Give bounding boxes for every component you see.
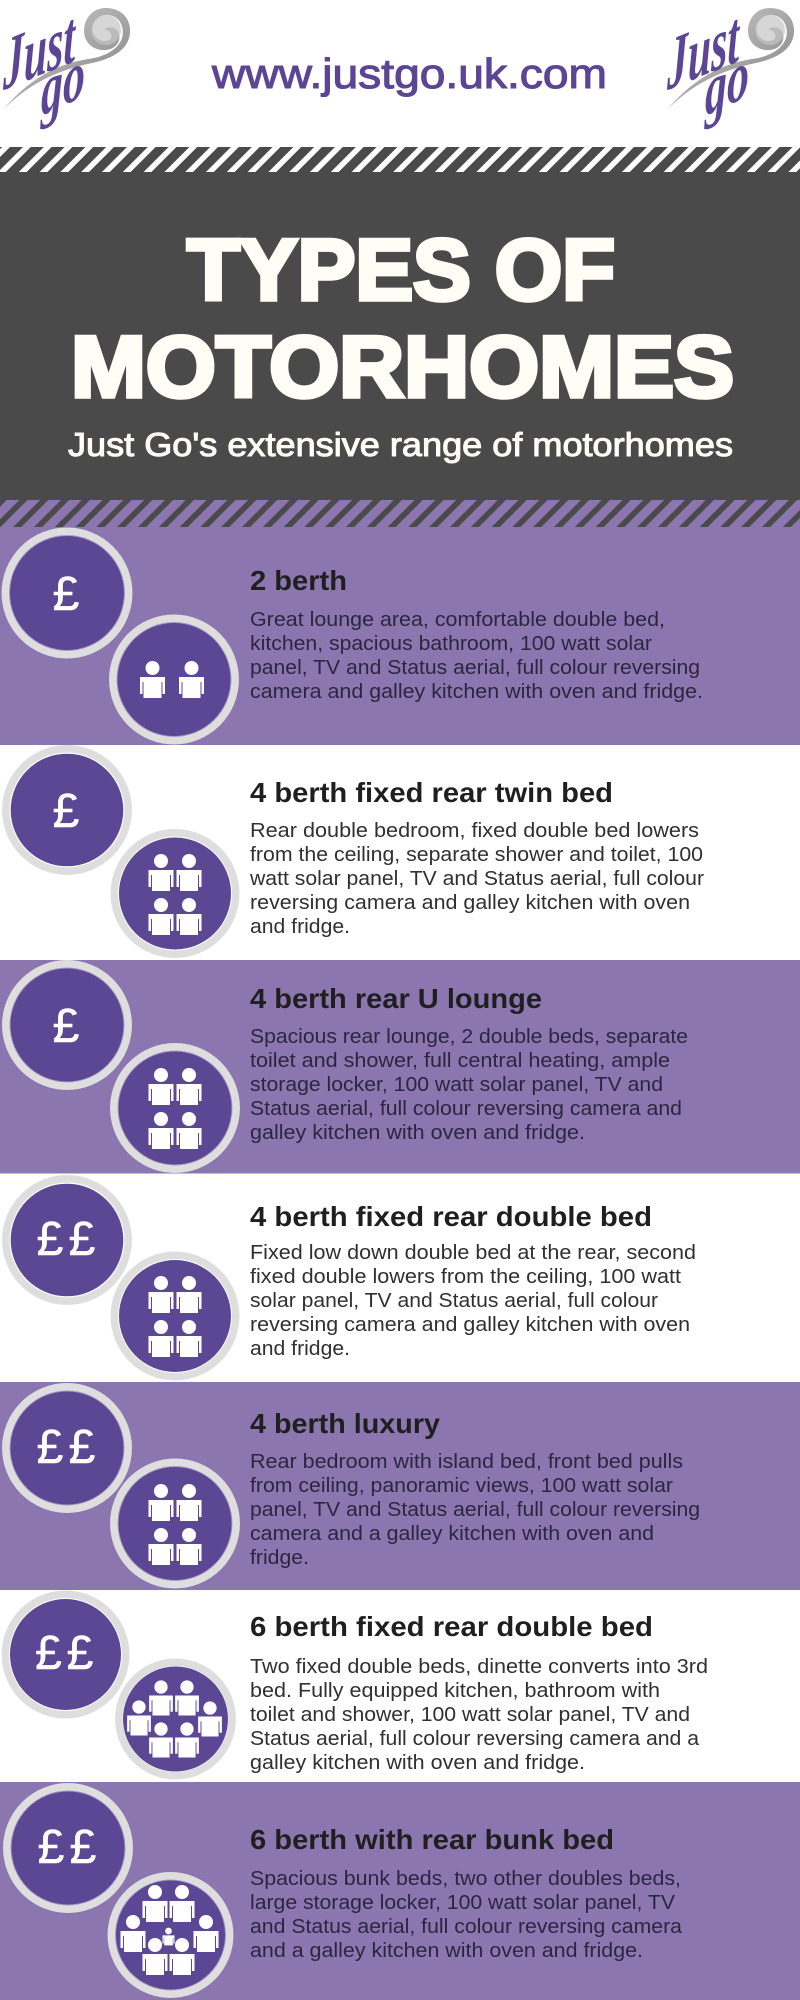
description: storage locker, 100 watt solar panel, TV and: [250, 1074, 663, 1096]
description: reversing camera and galley kitchen with oven: [250, 892, 690, 914]
description: panel, TV and Status aerial, full colour reversing: [250, 657, 700, 679]
icon: six people: [119, 1662, 232, 1776]
panel: 4 berth luxury: [0, 1382, 800, 1590]
heading: 6 berth fixed rear double bed: [250, 1611, 653, 1642]
description: kitchen, spacious bathroom, 100 watt solar: [250, 633, 652, 655]
description: [250, 1242, 696, 1360]
description: Fixed low down double bed at the rear, second: [250, 1242, 696, 1264]
icon: price two pounds: £: [37, 1213, 63, 1266]
icon: four people: [114, 1462, 236, 1585]
description: [249, 820, 704, 938]
icon: price two pounds: [7, 1787, 129, 1909]
description: [250, 1026, 688, 1144]
logo left: [2, 0, 130, 133]
heading: 4 berth rear U lounge: [250, 983, 542, 1014]
icon: four people: [114, 1255, 236, 1377]
description: Rear double bedroom, fixed double bed lowers: [250, 820, 699, 842]
icon: price two pounds: £: [67, 1627, 93, 1680]
description: Two fixed double beds, dinette converts into 3rd: [250, 1656, 708, 1678]
icon: price two pounds: [6, 1387, 128, 1509]
heading: 4 berth luxury: [250, 1408, 440, 1439]
heading: 2 berth: [250, 565, 347, 596]
icon: four people: [114, 833, 236, 954]
logo right: [666, 0, 794, 133]
description: [250, 1868, 683, 1962]
description: bed. Fully equipped kitchen, bathroom with: [250, 1680, 660, 1702]
icon: price two pounds: [6, 1179, 128, 1301]
website url: www.justgo.uk.com: [211, 50, 607, 97]
icon: price two pounds: £: [70, 1821, 96, 1874]
title: [71, 223, 734, 416]
description: camera and a galley kitchen with oven and: [250, 1523, 654, 1545]
description: and fridge.: [250, 1338, 350, 1360]
subtitle: Just Go's extensive range of motorhomes: [68, 426, 733, 463]
description: from the ceiling, separate shower and toilet, 100: [250, 844, 703, 866]
panel: 4 berth fixed rear double bed: [0, 1174, 800, 1382]
icon: two people: [113, 618, 235, 741]
icon: price two pounds: £: [69, 1213, 95, 1266]
header: white strip: [0, 0, 800, 147]
description: Spacious bunk beds, two other doubles beds,: [250, 1868, 681, 1890]
description: Rear bedroom with island bed, front bed pulls: [250, 1451, 683, 1473]
icon: price one pound: £: [53, 1000, 79, 1053]
logo right: go: [704, 34, 749, 133]
icon: price one pound: £: [53, 568, 79, 621]
title: TYPES OF: [187, 223, 615, 319]
description: toilet and shower, 100 watt solar panel, TV and: [250, 1704, 690, 1726]
panel: 6 berth with rear bunk bed: [0, 1782, 800, 2000]
heading: 4 berth fixed rear twin bed: [250, 777, 613, 808]
description: and Status aerial, full colour reversing camera: [250, 1916, 683, 1938]
description: and a galley kitchen with oven and fridge.: [250, 1940, 643, 1962]
description: galley kitchen with oven and fridge.: [250, 1122, 585, 1144]
icon: price one pound: [5, 531, 129, 655]
description: Status aerial, full colour reversing camera and: [250, 1098, 682, 1120]
panel: 2 berth: [0, 527, 800, 745]
title panel: [0, 172, 800, 500]
title: MOTORHOMES: [71, 320, 734, 416]
description: galley kitchen with oven and fridge.: [250, 1752, 585, 1774]
description: solar panel, TV and Status aerial, full colour: [250, 1290, 658, 1312]
description: Status aerial, full colour reversing camera and a: [250, 1728, 700, 1750]
description: [250, 609, 703, 703]
description: from ceiling, panoramic views, 100 watt solar: [250, 1475, 673, 1497]
description: camera and galley kitchen with oven and fridge.: [250, 681, 703, 703]
description: watt solar panel, TV and Status aerial, full colour: [249, 868, 704, 890]
icon: four people: [114, 1047, 236, 1169]
heading: 6 berth with rear bunk bed: [250, 1824, 614, 1855]
description: large storage locker, 100 watt solar panel, TV: [250, 1892, 676, 1914]
panel: 4 berth rear U lounge: [0, 960, 800, 1174]
icon: price two pounds: £: [69, 1421, 95, 1474]
description: fridge.: [250, 1547, 309, 1569]
description: panel, TV and Status aerial, full colour reversing: [250, 1499, 700, 1521]
icon: price two pounds: £: [37, 1421, 63, 1474]
icon: price two pounds: £: [38, 1821, 64, 1874]
panel: 4 berth fixed rear twin bed: [0, 745, 800, 960]
description: fixed double lowers from the ceiling, 100 watt: [250, 1266, 681, 1288]
description: [250, 1656, 708, 1774]
logo left: go: [40, 34, 85, 133]
icon: price two pounds: [5, 1594, 126, 1715]
heading: 4 berth fixed rear double bed: [250, 1201, 652, 1232]
description: reversing camera and galley kitchen with oven: [250, 1314, 690, 1336]
icon: price two pounds: £: [35, 1627, 62, 1680]
icon: six people and a child: [111, 1876, 230, 1994]
description: and fridge.: [250, 916, 350, 938]
icon: price one pound: £: [53, 785, 79, 838]
panel: 6 berth fixed rear double bed: [0, 1590, 800, 1782]
description: [250, 1451, 700, 1569]
description: Spacious rear lounge, 2 double beds, separate: [250, 1026, 688, 1048]
description: Great lounge area, comfortable double bed,: [250, 609, 665, 631]
icon: price one pound: [6, 749, 128, 871]
description: toilet and shower, full central heating, ample: [250, 1050, 670, 1072]
icon: price one pound: [6, 964, 128, 1086]
